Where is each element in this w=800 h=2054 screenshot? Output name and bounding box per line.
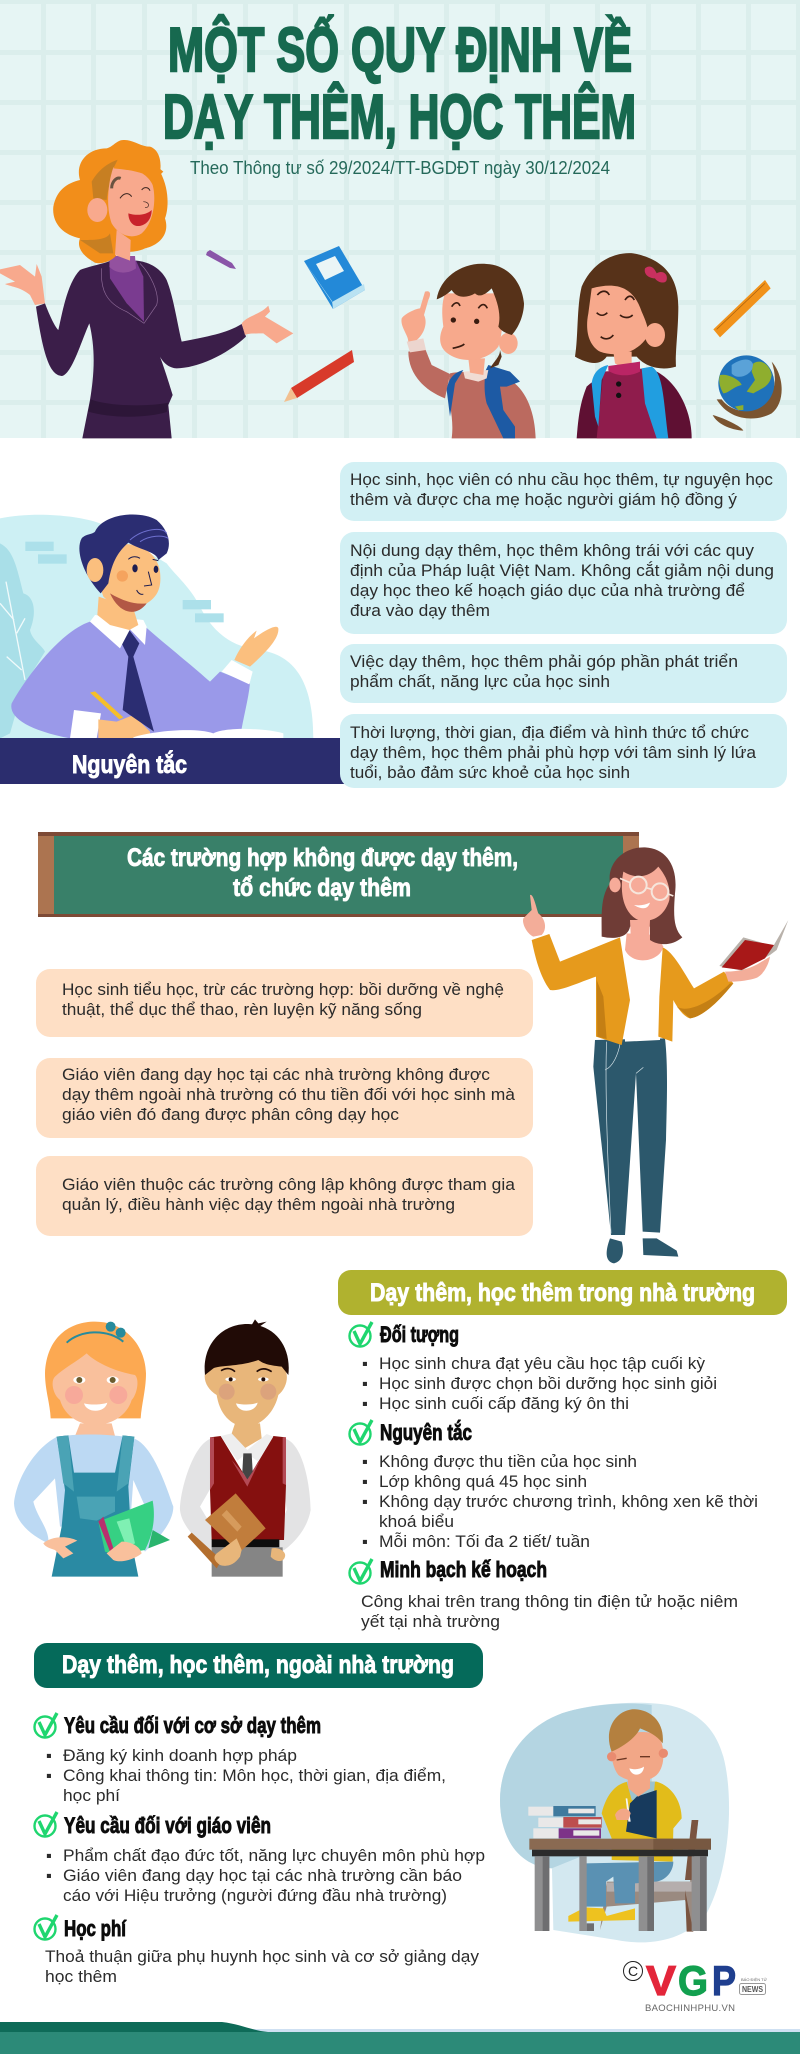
icon: red pencil <box>284 350 354 402</box>
logo: VGP News: V <box>646 1957 676 2004</box>
illustration: student at desk <box>500 1703 729 1942</box>
panel: trường hợp 3: Giáo viên thuộc các trường công lập không được tham gia <box>62 1176 516 1194</box>
panel: nguyên tắc box 2: đưa vào dạy thêm <box>350 602 490 620</box>
panel: header with grid background <box>0 0 800 438</box>
heading: yêu cầu giáo viên: Yêu cầu đối với giáo viên <box>64 1813 271 1838</box>
illustration: laughing teacher <box>0 140 293 438</box>
panel: trường hợp 1: thuật, thể dục thể thao, rèn luyện kỹ năng sống <box>62 1001 422 1019</box>
illustration: boy and girl with backpacks <box>401 253 782 438</box>
panel: nguyên tắc box 1: thêm và được cha mẹ hoặc người giám hộ đồng ý <box>350 491 738 509</box>
list: đối tượng: Học sinh chưa đạt yêu cầu học tập cuối kỳ <box>379 1355 706 1373</box>
panel: trường hợp 3 <box>36 1156 533 1236</box>
panel: trường hợp 2: Giáo viên đang dạy học tại các nhà trường không được <box>62 1066 490 1084</box>
footer band <box>0 2022 800 2054</box>
logo: VGP News: P <box>712 1957 736 2004</box>
text: học phí <box>45 1948 480 1986</box>
logo: VGP News: BÁO ĐIỆN TỬ <box>741 1977 768 1982</box>
panel: trường hợp 2 <box>36 1058 533 1138</box>
list: yêu cầu giáo viên: Giáo viên đang dạy học tại các nhà trường cần báo <box>63 1867 462 1885</box>
list: đối tượng: ▪ <box>362 1355 368 1373</box>
list: nguyên tắc trong trường: Mỗi môn: Tối đa 2 tiết/ tuần <box>379 1532 590 1551</box>
panel: nguyên tắc box 4 <box>340 714 787 788</box>
panel: nguyên tắc box 3 <box>340 644 787 703</box>
list: đối tượng: Học sinh được chọn bồi dưỡng học sinh giỏi <box>379 1375 717 1393</box>
banner: Nguyên tắc: Nguyên tắc <box>72 749 187 779</box>
panel: nguyên tắc box 2: định của Pháp luật Việt Nam. Không cắt giảm nội dung <box>350 561 774 580</box>
banner: Nguyên tắc <box>0 738 346 784</box>
title <box>163 16 636 152</box>
text: minh bạch: Công khai trên trang thông tin điện tử hoặc niêm <box>361 1593 738 1611</box>
panel: nguyên tắc box 4: tuổi, bảo đảm sức khoẻ của học sinh <box>350 764 630 782</box>
boy <box>230 1423 262 1450</box>
list: nguyên tắc trong trường: ▪ <box>362 1493 368 1511</box>
panel: trường hợp 2: giáo viên đó đang được phân công dạy học <box>62 1106 399 1124</box>
list: yêu cầu giáo viên: Phẩm chất đạo đức tốt, năng lực chuyên môn phù hợp <box>63 1847 485 1865</box>
panel: nguyên tắc box 3: Việc dạy thêm, học thêm phải góp phần phát triển <box>350 653 738 671</box>
list: nguyên tắc trong trường: Không dạy trước chương trình, không xen kẽ thời <box>379 1493 758 1511</box>
logo: VGP News <box>624 1957 768 2014</box>
panel: trường hợp 3: quản lý, điều hành việc dạy thêm ngoài nhà trường <box>62 1196 455 1214</box>
list: yêu cầu cơ sở: Đăng ký kinh doanh hợp pháp <box>63 1747 297 1765</box>
illustration: teacher pointing with book <box>523 847 788 1263</box>
list: yêu cầu giáo viên: ▪ <box>46 1847 52 1865</box>
icon: check học phí <box>34 1915 57 1940</box>
panel: trường hợp 2: dạy thêm ngoài nhà trường có thu tiền đối với học sinh mà <box>62 1086 516 1104</box>
list: nguyên tắc trong trường: ▪ <box>362 1533 368 1551</box>
list: yêu cầu giáo viên <box>46 1847 485 1905</box>
list: đối tượng: Học sinh cuối cấp đăng ký ôn thi <box>379 1395 629 1413</box>
icon: blue book <box>304 246 365 309</box>
heading: Đối tượng: Đối tượng <box>380 1322 459 1347</box>
subtitle: Theo Thông tư số 29/2024/TT-BGDĐT ngày 30/12/2024 <box>190 158 610 178</box>
text: minh bạch <box>361 1593 738 1631</box>
heading bar: ngoài nhà trường: Dạy thêm, học thêm, ngoài nhà trường <box>62 1651 454 1679</box>
ruler <box>713 280 771 337</box>
list: nguyên tắc trong trường: Lớp không quá 45 học sinh <box>379 1473 587 1491</box>
list: yêu cầu cơ sở: Công khai thông tin: Môn học, thời gian, địa điểm, <box>63 1767 446 1785</box>
panel: trường hợp 1 <box>36 969 533 1037</box>
panel: nguyên tắc box 2 <box>340 532 787 634</box>
text: minh bạch: yết tại nhà trường <box>361 1613 500 1631</box>
list: nguyên tắc trong trường <box>362 1453 758 1551</box>
list: đối tượng: ▪ <box>362 1395 368 1413</box>
panel: nguyên tắc box 1 <box>340 462 787 521</box>
icon: check Minh bạch <box>350 1559 372 1584</box>
icon: check cơ sở <box>34 1713 57 1738</box>
heading: Minh bạch kế hoạch: Minh bạch kế hoạch <box>380 1557 547 1582</box>
panel: nguyên tắc box 4: dạy thêm, học thêm phải phù hợp với tâm sinh lý lứa <box>350 744 757 762</box>
panel: nguyên tắc box 4: Thời lượng, thời gian, địa điểm và hình thức tổ chức <box>350 724 749 742</box>
panel: nguyên tắc box 3: phẩm chất, năng lực của học sinh <box>350 673 610 691</box>
girl <box>577 370 692 438</box>
heading board: các trường hợp không được dạy thêm: Các trường hợp không được dạy thêm, <box>127 844 518 872</box>
text: học phí: học thêm <box>45 1968 117 1986</box>
list: đối tượng <box>362 1355 717 1413</box>
list: yêu cầu cơ sở <box>46 1747 446 1805</box>
panel: trường hợp 1: Học sinh tiểu học, trừ các trường hợp: bồi dưỡng về nghệ <box>62 981 504 999</box>
logo: VGP News: G <box>678 1957 708 2004</box>
list: đối tượng: ▪ <box>362 1375 368 1393</box>
list: nguyên tắc trong trường: ▪ <box>362 1473 368 1491</box>
heading: học phí: Học phí <box>64 1916 127 1941</box>
list: nguyên tắc trong trường: Không được thu tiền của học sinh <box>379 1453 637 1471</box>
logo: VGP News: C <box>628 1963 638 1979</box>
panel: nguyên tắc box 2: dạy học theo kế hoạch giáo dục của nhà trường để <box>350 582 745 600</box>
icon: check Nguyên tắc <box>350 1420 372 1444</box>
list: yêu cầu cơ sở: học phí <box>63 1787 120 1805</box>
text: học phí: Thoả thuận giữa phụ huynh học sinh và cơ sở giảng dạy <box>45 1948 480 1966</box>
illustration: man writing, with blue blob <box>0 514 313 738</box>
illustration: schoolgirl and schoolboy <box>14 1319 311 1577</box>
list: yêu cầu giáo viên: ▪ <box>46 1867 52 1885</box>
list: nguyên tắc trong trường: ▪ <box>362 1453 368 1471</box>
heading bar: ngoài nhà trường <box>34 1643 483 1688</box>
list: nguyên tắc trong trường: khoá biểu <box>379 1513 454 1531</box>
boy <box>408 348 450 398</box>
list: yêu cầu cơ sở: ▪ <box>46 1747 52 1765</box>
icon: check Đối tượng <box>350 1322 372 1346</box>
heading: yêu cầu cơ sở: Yêu cầu đối với cơ sở dạy thêm <box>64 1713 321 1738</box>
list: yêu cầu cơ sở: ▪ <box>46 1767 52 1785</box>
heading bar: trong nhà trường <box>338 1270 787 1315</box>
icon: small purple pencil <box>206 250 236 269</box>
heading board: các trường hợp không được dạy thêm: tổ chức dạy thêm <box>233 874 411 902</box>
girl <box>45 1322 146 1418</box>
logo: VGP News: NEWS <box>742 1985 764 1994</box>
panel: nguyên tắc box 2: Nội dung dạy thêm, học thêm không trái với các quy <box>350 542 755 560</box>
logo: VGP News: BAOCHINHPHU.VN <box>645 2003 735 2014</box>
heading: Nguyên tắc: Nguyên tắc <box>380 1420 472 1445</box>
heading board: các trường hợp không được dạy thêm <box>38 832 639 917</box>
icon: check giáo viên <box>34 1812 57 1836</box>
panel: nguyên tắc box 1: Học sinh, học viên có nhu cầu học thêm, tự nguyện học <box>350 471 773 489</box>
globe <box>717 362 782 418</box>
list: yêu cầu giáo viên: cáo với Hiệu trưởng (người đứng đầu nhà trường) <box>63 1887 447 1905</box>
